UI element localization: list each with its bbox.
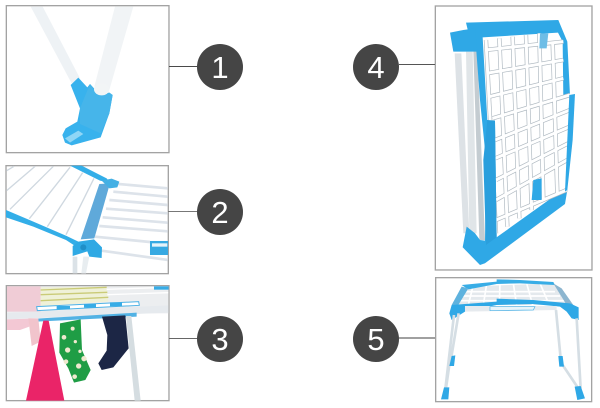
connector line 5	[399, 337, 435, 339]
blue outer frame	[463, 20, 570, 265]
hinge	[73, 239, 102, 258]
panel 4: folded rack	[435, 6, 592, 270]
number badge 3	[197, 316, 243, 362]
front rail	[7, 305, 168, 319]
rack top grid	[453, 283, 573, 305]
number badge 3: 3	[211, 322, 229, 357]
connector line 4	[399, 64, 435, 66]
top frame	[462, 279, 555, 289]
connector line 2	[168, 210, 198, 212]
number badge 4: 4	[367, 50, 385, 85]
rack top with laundry	[7, 286, 168, 313]
blue frame	[6, 210, 78, 247]
connector line 3	[169, 338, 198, 340]
label tag	[150, 241, 168, 255]
panel 5: stool mode rack	[436, 278, 592, 402]
number badge 5	[353, 316, 399, 362]
navy sock	[98, 315, 129, 370]
folded tubes	[455, 53, 469, 233]
number badge 5: 5	[367, 322, 385, 357]
number badge 1	[197, 44, 243, 90]
right rods	[95, 184, 168, 260]
pink cloth	[7, 319, 29, 330]
crossbar	[465, 306, 557, 312]
legs	[445, 310, 581, 389]
grid bars	[485, 33, 570, 233]
center bar	[81, 183, 110, 239]
panel 3: hanging clothes	[6, 286, 169, 401]
panel 2: hinge detail	[6, 166, 168, 274]
hinge clips	[450, 28, 477, 52]
right tube	[94, 7, 133, 90]
grid shadows	[485, 33, 570, 233]
legs	[73, 257, 77, 273]
number badge 4	[353, 44, 399, 90]
green sock	[59, 319, 91, 383]
panel 1: foot detail	[6, 6, 169, 153]
left rods	[7, 166, 94, 235]
number badge 2	[197, 189, 243, 235]
number badge 2: 2	[211, 195, 229, 230]
left tube	[31, 7, 80, 83]
number badge 1: 1	[211, 50, 229, 85]
feet and clips	[441, 355, 585, 400]
rack leg	[126, 316, 141, 401]
red dress	[26, 321, 64, 401]
blue foot	[62, 78, 113, 145]
connector line 1	[169, 66, 198, 68]
